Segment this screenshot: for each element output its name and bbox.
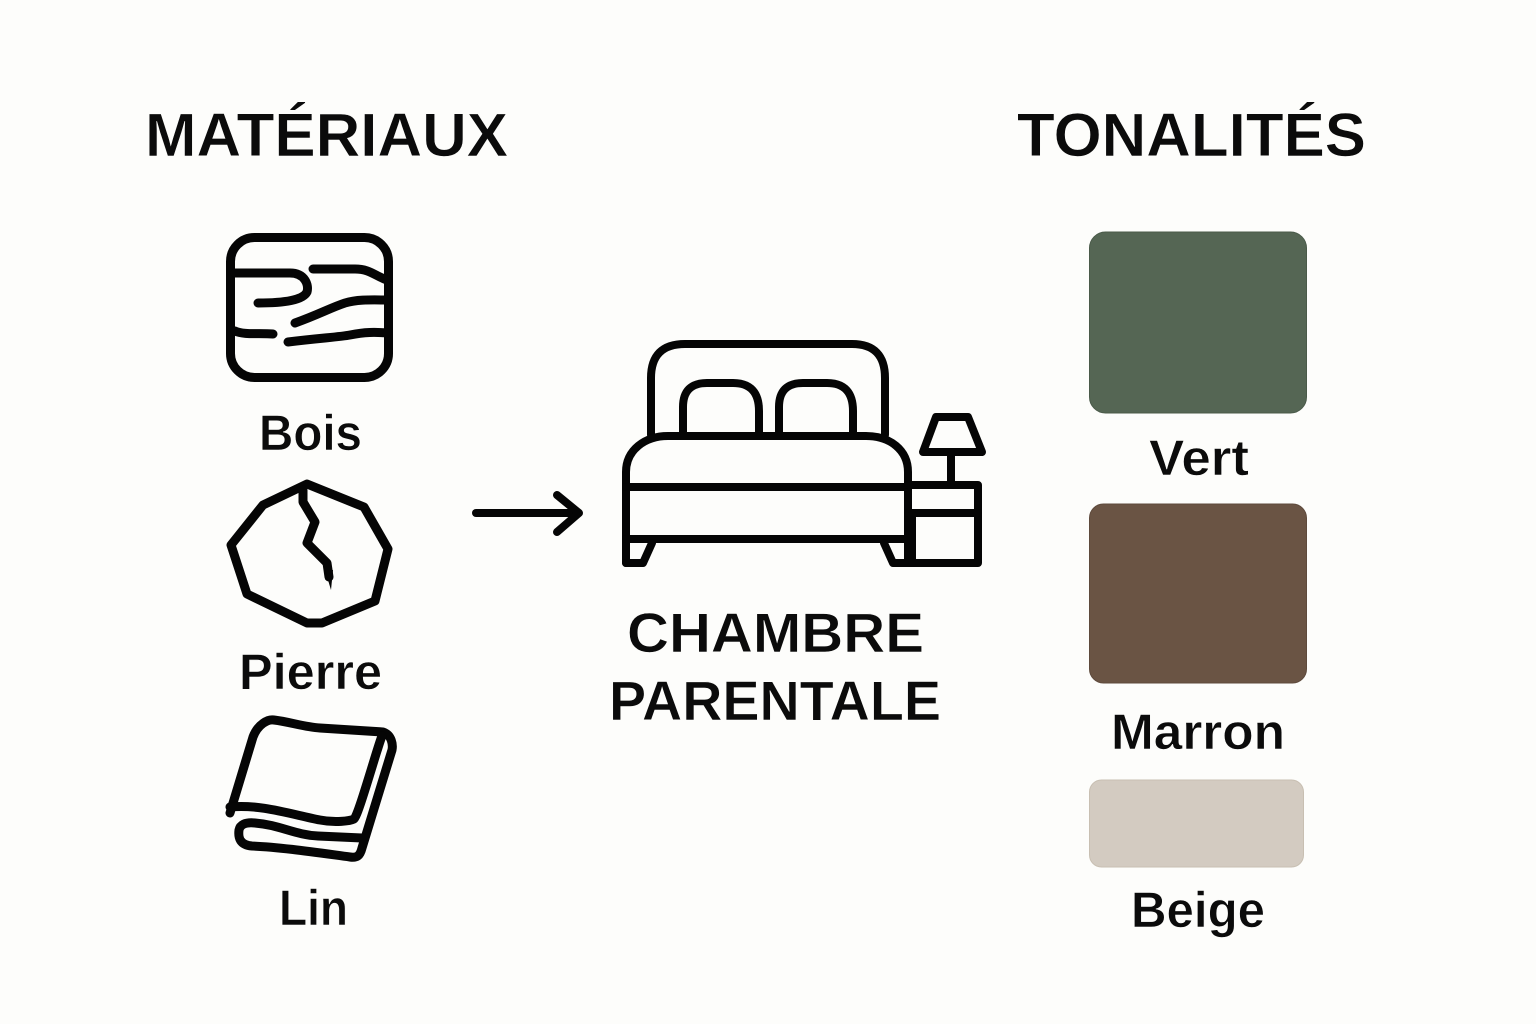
heading: master bedroom: CHAMBRE [627,601,924,664]
label: brown: Marron [1111,704,1285,760]
heading: master bedroom: PARENTALE [609,669,941,732]
heading: tones: TONALITÉS [1017,101,1366,169]
label: linen: Lin [279,880,348,936]
panel: materials [145,101,508,936]
arrow [476,495,579,532]
panel: tones [1017,101,1366,938]
label: beige: Beige [1131,882,1265,938]
label: stone: Pierre [239,644,382,700]
label: green: Vert [1149,430,1249,486]
icon: bed with nightstand [626,344,982,563]
icon: stone [231,484,388,623]
panel: master bedroom [609,344,982,732]
swatch: green [1090,232,1306,413]
icon: linen [230,720,392,857]
heading: materials: MATÉRIAUX [145,101,508,169]
icon: wood [230,238,388,378]
label: wood: Bois [259,405,362,461]
swatch: brown [1090,504,1306,683]
swatch: beige [1090,780,1304,867]
